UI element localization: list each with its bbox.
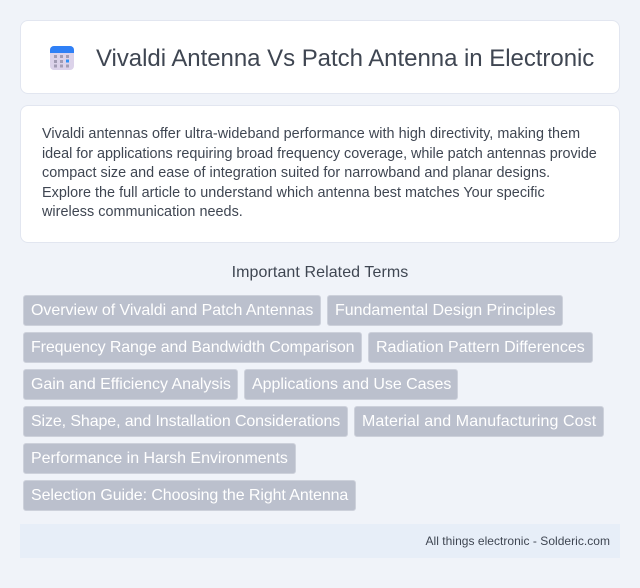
chips: related terms: Size, Shape, and Installation Considerations [31, 413, 340, 430]
chips: related terms [23, 295, 604, 511]
panel: summary text [20, 105, 620, 243]
chips: related terms: Material and Manufacturing Cost [362, 413, 596, 430]
heading: related terms: Important Related Terms [232, 264, 408, 281]
chips: related terms: Gain and Efficiency Analysis [31, 376, 231, 393]
panel: title header [20, 20, 620, 94]
panel: summary text: wireless communication needs. [42, 204, 243, 220]
chips: related terms: Fundamental Design Principles [335, 302, 556, 319]
title: Vivaldi Antenna Vs Patch Antenna in Electronic [96, 45, 594, 72]
chips: related terms: Frequency Range and Bandwidth Comparison [31, 339, 354, 356]
footer [20, 524, 620, 558]
chips: related terms: Overview of Vivaldi and Patch Antennas [31, 302, 313, 319]
icon: calendar [50, 46, 74, 70]
chips: related terms: Applications and Use Cases [252, 376, 451, 393]
footer credit: All things electronic - Solderic.com [426, 534, 610, 548]
panel: summary text: Explore the full article to understand which antenna best matches Your specific [42, 185, 545, 201]
panel: summary text: ideal for applications requiring broad frequency coverage, while patch antennas provide [42, 146, 597, 162]
chips: related terms: Selection Guide: Choosing the Right Antenna [31, 487, 348, 504]
panel: summary text: compact size and ease of integration suited for narrowband and planar designs. [42, 165, 550, 181]
chips: related terms: Performance in Harsh Environments [31, 450, 288, 467]
chips: related terms: Radiation Pattern Differences [376, 339, 585, 356]
panel: summary text: Vivaldi antennas offer ultra-wideband performance with high directivity, making them [42, 126, 580, 142]
